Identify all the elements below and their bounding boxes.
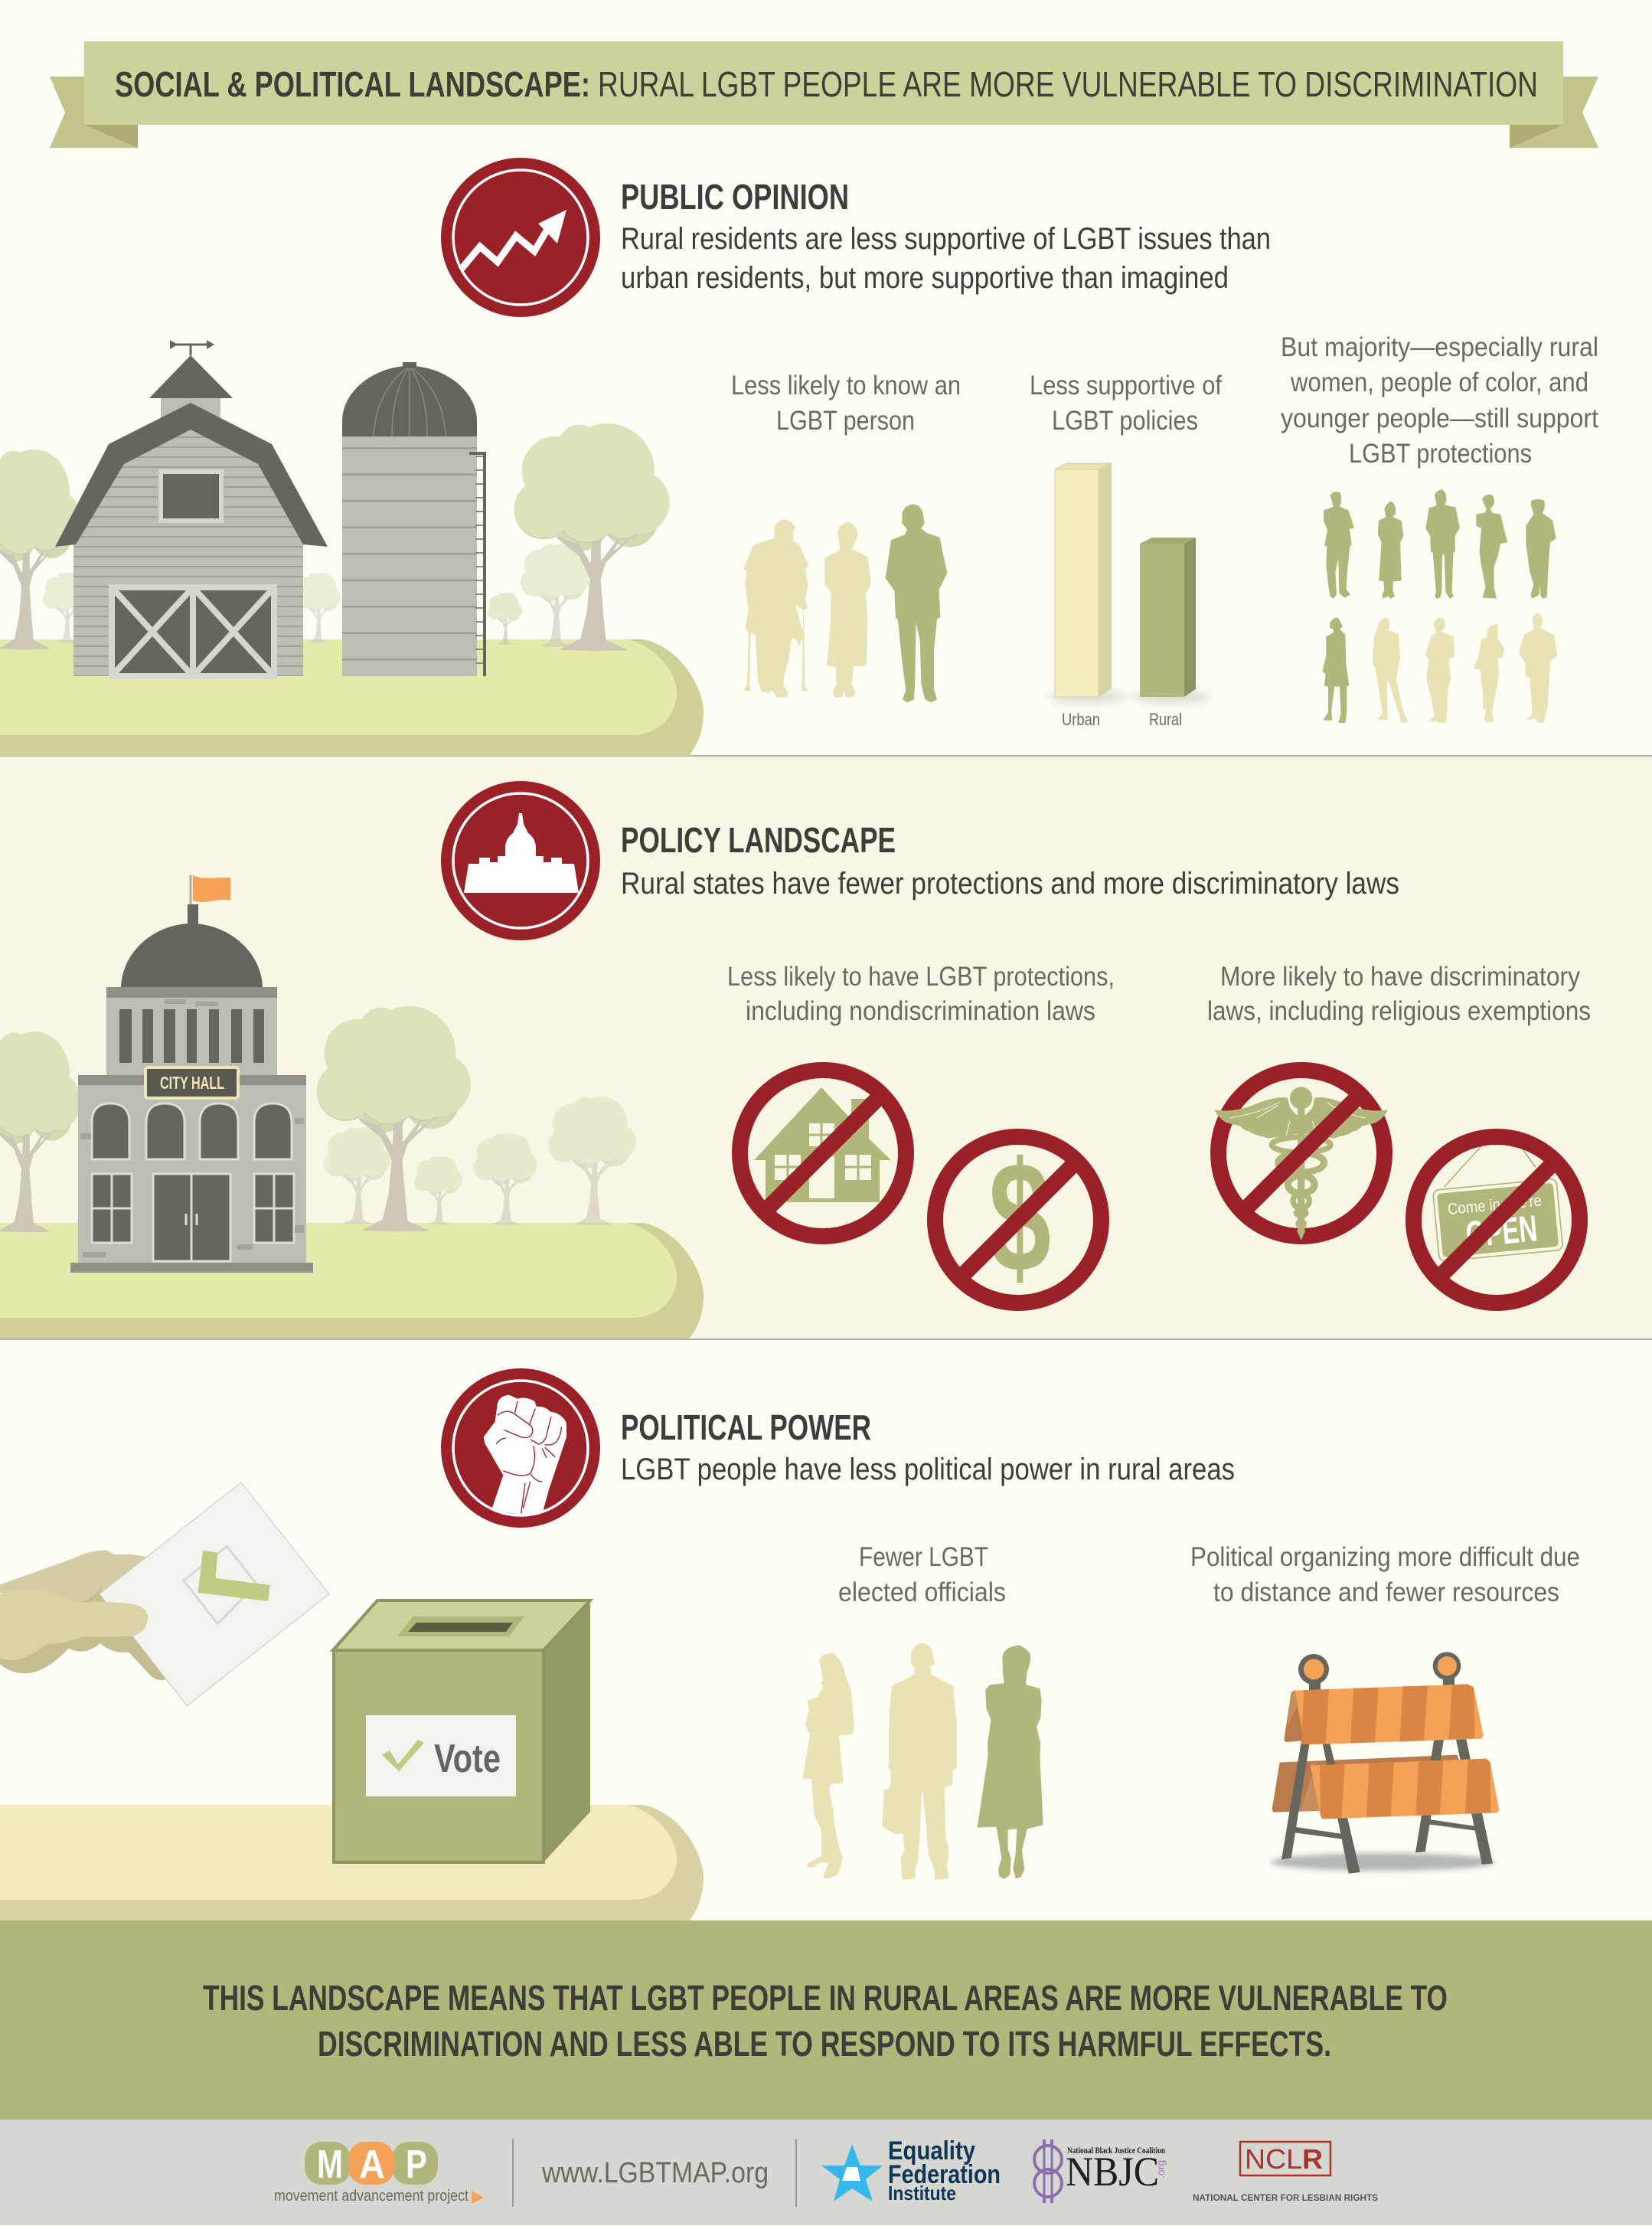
text: public opinion summary: Rural residents are less supportive of LGBT issues than [621, 222, 1271, 256]
logo: MAP [274, 2142, 484, 2205]
illustration: barn [55, 340, 328, 676]
text: less likely to know: Less likely to know an [731, 371, 961, 400]
text: less likely to know: LGBT person [776, 406, 915, 436]
icon: policy capitol [441, 781, 600, 940]
text: less supportive [1030, 371, 1222, 436]
logo: NBJC: NBJC [1066, 2149, 1159, 2195]
text: majority still supports: LGBT protections [1349, 439, 1532, 469]
bar chart: urban vs rural: Rural [1149, 710, 1182, 729]
heading: policy landscape: POLICY LANDSCAPE [621, 820, 896, 860]
logo: Equality Federation Institute: Institute [888, 2182, 956, 2205]
panel: policy landscape background [0, 756, 1652, 1339]
logo: Equality Federation Institute: Federation [888, 2160, 1001, 2189]
illustration: ballot box: Vote [434, 1737, 501, 1781]
icon: political power fist [441, 1368, 600, 1528]
text: majority still supports: But majority—especially rural [1281, 332, 1598, 362]
text: majority still supports [1281, 332, 1598, 469]
logo: NBJC: .org [1154, 2160, 1167, 2179]
text: less likely protections: Less likely to have LGBT protections, [727, 962, 1115, 992]
panel: footer [0, 2120, 1652, 2225]
icon: no money: $ [988, 1129, 1051, 1305]
logo: NBJC [1034, 2139, 1167, 2203]
heading: political power: POLITICAL POWER [621, 1407, 871, 1447]
illustration: ballot box [333, 1600, 590, 1862]
illustration: city hall [70, 875, 313, 1273]
icon: no open sign: OPEN [1464, 1208, 1539, 1256]
text: less likely to know [731, 371, 961, 436]
icon: no house [739, 1071, 906, 1236]
title banner [50, 41, 1598, 148]
logo: NCLR: R [1302, 2143, 1323, 2175]
illustration: farm ground [0, 639, 704, 756]
text: more likely discriminatory: laws, including religious exemptions [1207, 996, 1591, 1026]
logo: NBJC: National Black Justice Coalition [1067, 2145, 1165, 2156]
text: majority still supports: women, people of color, and [1290, 368, 1588, 397]
text: public opinion summary: urban residents, but more supportive than imagined [621, 261, 1229, 295]
logo: MAP: A [359, 2143, 385, 2187]
icon: public opinion rising arrow [441, 158, 600, 317]
text: more likely discriminatory: More likely to have discriminatory [1220, 962, 1580, 992]
divider lines [513, 2139, 796, 2207]
text: less supportive: LGBT policies [1052, 406, 1198, 436]
text: fewer elected officials [838, 1542, 1006, 1607]
logo: Equality Federation Institute [821, 2136, 1001, 2205]
icon: no medical caduceus [1215, 1071, 1388, 1240]
text: fewer elected officials: elected officials [838, 1577, 1006, 1607]
icon: no open sign: Come in, we're [1447, 1192, 1543, 1218]
silhouettes: elected officials [802, 1643, 1043, 1880]
illustration: hand and ballot [0, 1482, 329, 1706]
text: organizing more difficult: to distance and fewer resources [1213, 1577, 1559, 1607]
panel: conclusion band [0, 1920, 1652, 2120]
text: organizing more difficult: Political organizing more difficult due [1190, 1542, 1580, 1572]
icon: no money [935, 1129, 1101, 1305]
text: policy summary: Rural states have fewer protections and more discriminatory laws [621, 867, 1399, 901]
text: less supportive: Less supportive of [1030, 371, 1222, 400]
text: more likely discriminatory [1207, 962, 1591, 1026]
text: organizing more difficult [1190, 1542, 1580, 1607]
text: website: www.LGBTMAP.org [541, 2157, 769, 2189]
text: less likely protections: including nondiscrimination laws [746, 996, 1095, 1026]
logo: NCLR: NATIONAL CENTER FOR LESBIAN RIGHTS [1193, 2192, 1378, 2203]
illustration: city ground [0, 1223, 704, 1339]
logo: NCLR [1193, 2142, 1378, 2203]
logo: MAP: P [406, 2143, 427, 2187]
illustration: city trees [0, 1006, 636, 1232]
silhouettes: three people know [743, 504, 947, 702]
illustration: vote ground [0, 1805, 704, 1920]
text: majority still supports: younger people—still support [1281, 404, 1598, 433]
title banner: SOCIAL & POLITICAL LANDSCAPE: [115, 64, 590, 104]
bar chart: urban vs rural [1049, 463, 1210, 729]
panel: conclusion band: DISCRIMINATION AND LESS ABLE TO RESPOND TO ITS HARMFUL EFFECTS. [318, 2024, 1331, 2064]
bar chart: urban vs rural: Urban [1062, 710, 1100, 729]
logo: NCLR: NCL [1245, 2143, 1302, 2175]
illustration: silo [342, 362, 485, 676]
text: political summary: LGBT people have less political power in rural areas [621, 1453, 1235, 1486]
logo: Equality Federation Institute: Equality [888, 2136, 975, 2166]
text: public opinion summary [621, 222, 1271, 295]
heading: public opinion: PUBLIC OPINION [621, 177, 849, 217]
text: fewer elected officials: Fewer LGBT [859, 1542, 988, 1572]
logo: MAP: M [317, 2143, 343, 2187]
illustration: farm trees [0, 423, 670, 651]
logo: MAP: movement advancement project [274, 2188, 469, 2205]
illustration: city hall: CITY HALL [160, 1073, 224, 1093]
text: less likely protections [727, 962, 1115, 1026]
icon: no open sign [1413, 1136, 1580, 1303]
silhouettes: ten people support [1322, 489, 1557, 723]
illustration: road barricade [1271, 1652, 1499, 1874]
